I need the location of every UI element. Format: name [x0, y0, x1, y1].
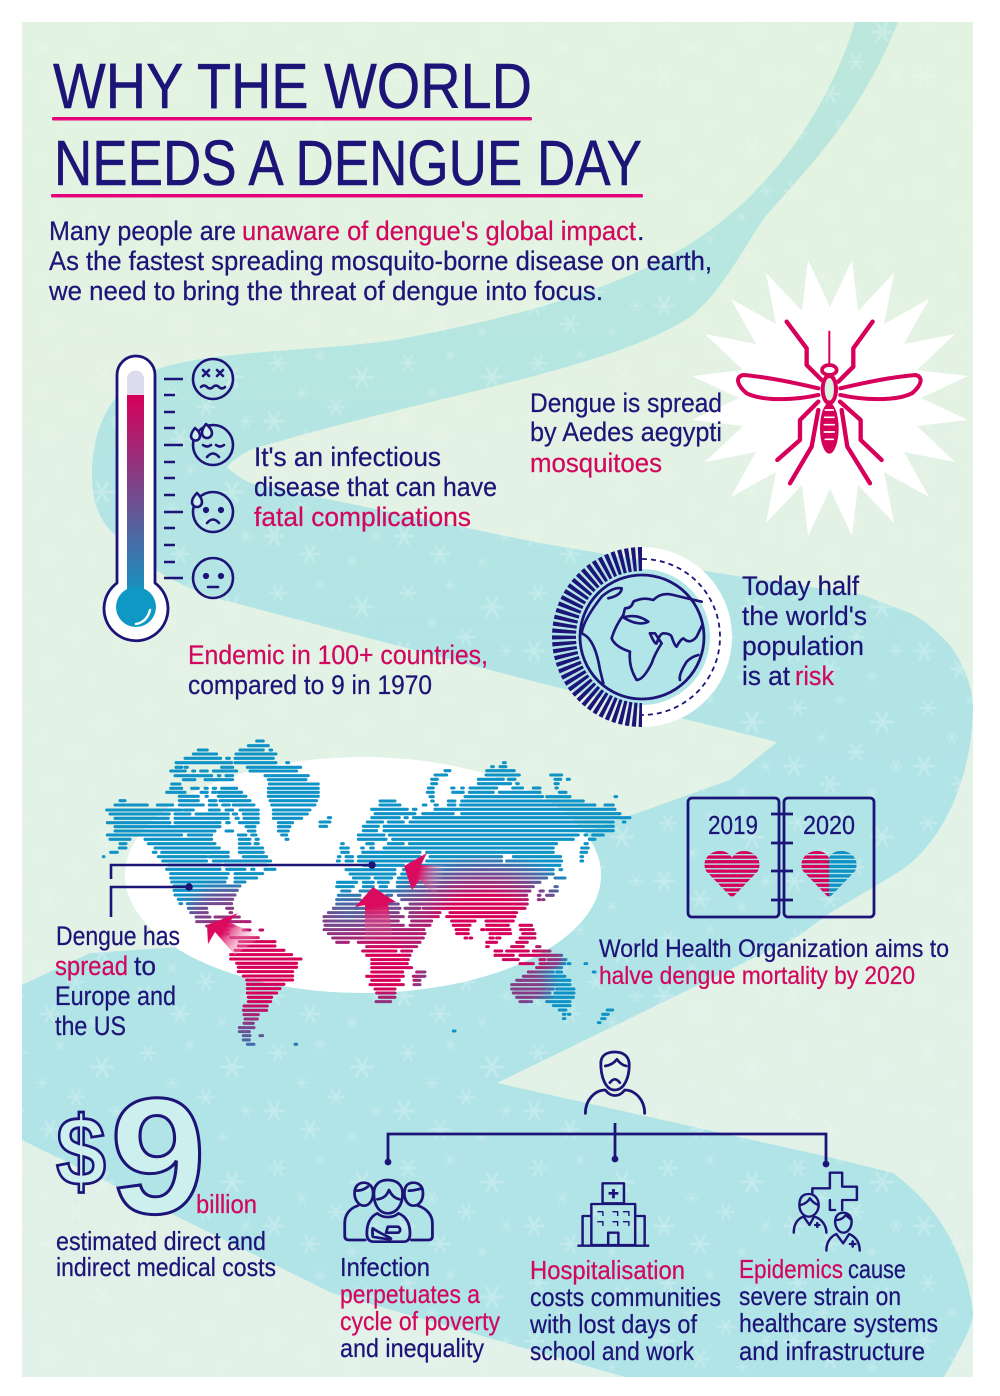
text: dengue has spread: spread [55, 951, 128, 981]
text: poverty: Infection [340, 1252, 430, 1282]
tree connector [386, 1123, 828, 1166]
text: epidemics: Epidemics [739, 1254, 843, 1284]
icon: thermometer [104, 356, 183, 641]
text: epidemics: cause [848, 1254, 906, 1284]
intro text: unaware of dengue's global impact [242, 216, 636, 246]
text: endemic countries: Endemic in 100+ countries, [188, 640, 488, 670]
text: half the world's population: Today half [742, 571, 859, 601]
text: half the world's population: is at [742, 661, 790, 691]
icon: severity faces [191, 359, 233, 598]
intro text: we need to bring the threat of dengue into focus. [48, 276, 603, 306]
big figure: $9 [56, 1064, 206, 1248]
icon: group of people [345, 1180, 432, 1242]
text: dengue has spread [55, 921, 180, 1041]
text: hospitalisation: Hospitalisation [530, 1255, 685, 1285]
text: billion costs: estimated direct and [56, 1226, 266, 1256]
text: hospitalisation [529, 1255, 721, 1366]
text: WHO aim [599, 935, 949, 990]
text: WHO aim: halve dengue mortality by 2020 [599, 962, 915, 990]
text: hospitalisation: school and work [530, 1336, 695, 1366]
world map [102, 740, 632, 1046]
intro text [48, 216, 712, 306]
text: WHO aim: World Health Organization aims to [599, 935, 949, 963]
text: half the world's population: risk [795, 661, 834, 691]
text: epidemics: healthcare systems [739, 1308, 938, 1338]
intro text: . [637, 216, 645, 246]
text: spread by mosquitoes: Dengue is spread [530, 388, 722, 418]
icon: hospital [577, 1183, 649, 1246]
text: poverty: cycle of poverty [340, 1306, 500, 1336]
text: epidemics: and infrastructure [739, 1336, 925, 1366]
arrow: to Europe from Asia [404, 853, 447, 897]
icon: calendar 2019 to 2020 [688, 798, 874, 917]
icon: healthcare workers with cross [794, 1173, 860, 1251]
text: infectious disease: fatal complications [254, 502, 471, 532]
text: endemic countries: compared to 9 in 1970 [188, 670, 432, 700]
text: poverty: and inequality [340, 1333, 484, 1363]
text: half the world's population: the world's [742, 601, 867, 631]
icon: calendar 2019 to 2020: 2020 [803, 810, 855, 840]
text: poverty [340, 1252, 500, 1363]
text: dengue has spread: to [134, 951, 156, 981]
text: half the world's population: population [742, 631, 864, 661]
icon: mosquito with white burst [692, 260, 968, 536]
icon: person [585, 1052, 645, 1113]
text: infectious disease: It's an infectious [254, 442, 441, 472]
text: spread by mosquitoes: by Aedes aegypti [530, 417, 722, 447]
text: spread by mosquitoes [530, 388, 722, 478]
text: dengue has spread: the US [55, 1011, 126, 1041]
text: hospitalisation: costs communities [530, 1282, 721, 1312]
text: dengue has spread: Dengue has [56, 921, 180, 951]
text: dengue has spread: Europe and [55, 981, 176, 1011]
icon: globe half at risk [564, 547, 732, 727]
big figure: $9: 9 [110, 1064, 206, 1248]
text: half the world's population [742, 571, 867, 691]
title: WHY THE WORLD [53, 50, 532, 122]
text: infectious disease [254, 442, 497, 532]
text: infectious disease: disease that can have [254, 472, 497, 502]
text: poverty: perpetuates a [340, 1279, 480, 1309]
icon: calendar 2019 to 2020: 2019 [708, 810, 758, 840]
text: billion costs: billion [196, 1189, 257, 1219]
big figure: $9: $ [56, 1096, 106, 1206]
arrow: to Europe from Africa [355, 887, 396, 940]
arrow: to the Americas [207, 913, 262, 955]
title [51, 50, 643, 199]
text: epidemics [739, 1254, 938, 1366]
connector lines: spread to Europe and the US [111, 862, 374, 917]
intro text: Many people are [49, 216, 236, 246]
text: billion costs: indirect medical costs [56, 1252, 276, 1282]
text: endemic countries [188, 640, 488, 700]
text: epidemics: severe strain on [739, 1281, 901, 1311]
text: billion costs [56, 1189, 276, 1282]
text: hospitalisation: with lost days of [529, 1309, 698, 1339]
intro text: As the fastest spreading mosquito-borne disease on earth, [49, 246, 712, 276]
text: spread by mosquitoes: mosquitoes [530, 448, 662, 478]
title: NEEDS A DENGUE DAY [54, 127, 642, 199]
